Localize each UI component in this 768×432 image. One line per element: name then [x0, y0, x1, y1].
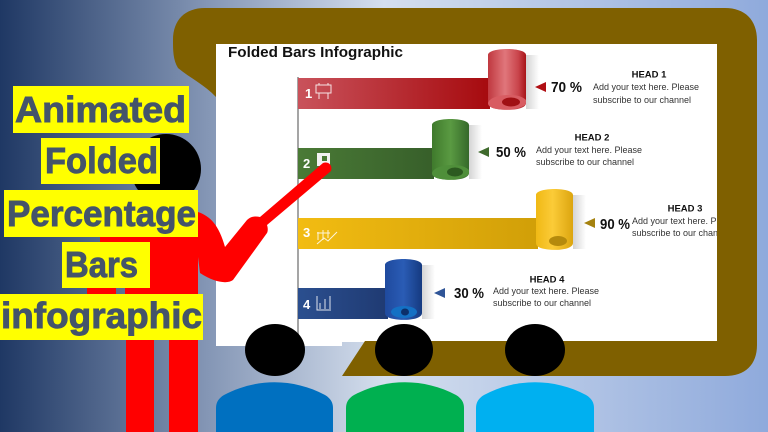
panel: white slide — [216, 44, 718, 346]
icon: bar chart — [317, 296, 331, 310]
audience member: blue — [216, 324, 333, 432]
text block: head 4 — [493, 274, 599, 308]
text label: Animated: Animated — [15, 89, 186, 130]
text block: head 4: HEAD 4 — [530, 274, 565, 286]
audience member: cyan — [476, 324, 594, 432]
marker: arrow 1 — [535, 82, 546, 92]
text block: head 1: HEAD 1 — [632, 70, 667, 80]
bar 4: blue — [298, 259, 435, 320]
text block: head 1: subscribe to our channel — [593, 95, 691, 105]
value: 50 percent: 50 % — [496, 145, 526, 161]
audience member: green — [346, 324, 464, 432]
title: Folded Bars Infographic — [228, 44, 403, 61]
value: 30 percent: 30 % — [454, 286, 484, 302]
text block: head 3: HEAD 3 — [668, 204, 702, 214]
bar 3: yellow — [298, 189, 586, 250]
bar 2: green — [298, 119, 482, 180]
text block: head 2: HEAD 2 — [575, 132, 609, 144]
text block: head 1: Add your text here. Please — [593, 82, 699, 92]
label: bar 3 number: 3 — [303, 225, 310, 240]
bar 1: red — [298, 49, 539, 110]
presenter figure — [87, 134, 331, 432]
text label: Folded: Folded — [45, 140, 158, 181]
icon: document — [317, 153, 330, 166]
speech bubble frame — [173, 8, 757, 376]
icon: billboard — [316, 83, 331, 99]
text block: head 4: Add your text here. Please — [493, 286, 599, 296]
label: bar 2 number: 2 — [303, 156, 310, 171]
text block: head 1 — [593, 70, 699, 105]
text block: head 2: subscribe to our channel — [536, 157, 634, 167]
text block: head 3 — [632, 204, 738, 238]
text label: Bars: Bars — [65, 244, 138, 285]
text block: head 2 — [536, 132, 642, 167]
label: bar 1 number: 1 — [305, 86, 312, 101]
text block: head 4: subscribe to our channel — [493, 298, 591, 308]
icon: growth chart — [317, 230, 337, 244]
value: 70 percent: 70 % — [551, 80, 582, 96]
marker: arrow 3 — [584, 218, 595, 228]
text block: head 3: subscribe to our channel — [632, 228, 730, 238]
text block: head 3: Add your text here. Please — [632, 216, 738, 226]
text block: head 2: Add your text here. Please — [536, 145, 642, 155]
vertical axis line — [297, 77, 299, 346]
text label: Percentage: Percentage — [7, 193, 196, 234]
marker: arrow 2 — [478, 147, 489, 157]
marker: arrow 4 — [434, 288, 445, 298]
text label: infographic: infographic — [1, 295, 202, 336]
label: bar 4 number: 4 — [303, 297, 311, 312]
value: 90 percent: 90 % — [600, 217, 630, 233]
pointing arm — [198, 162, 331, 282]
